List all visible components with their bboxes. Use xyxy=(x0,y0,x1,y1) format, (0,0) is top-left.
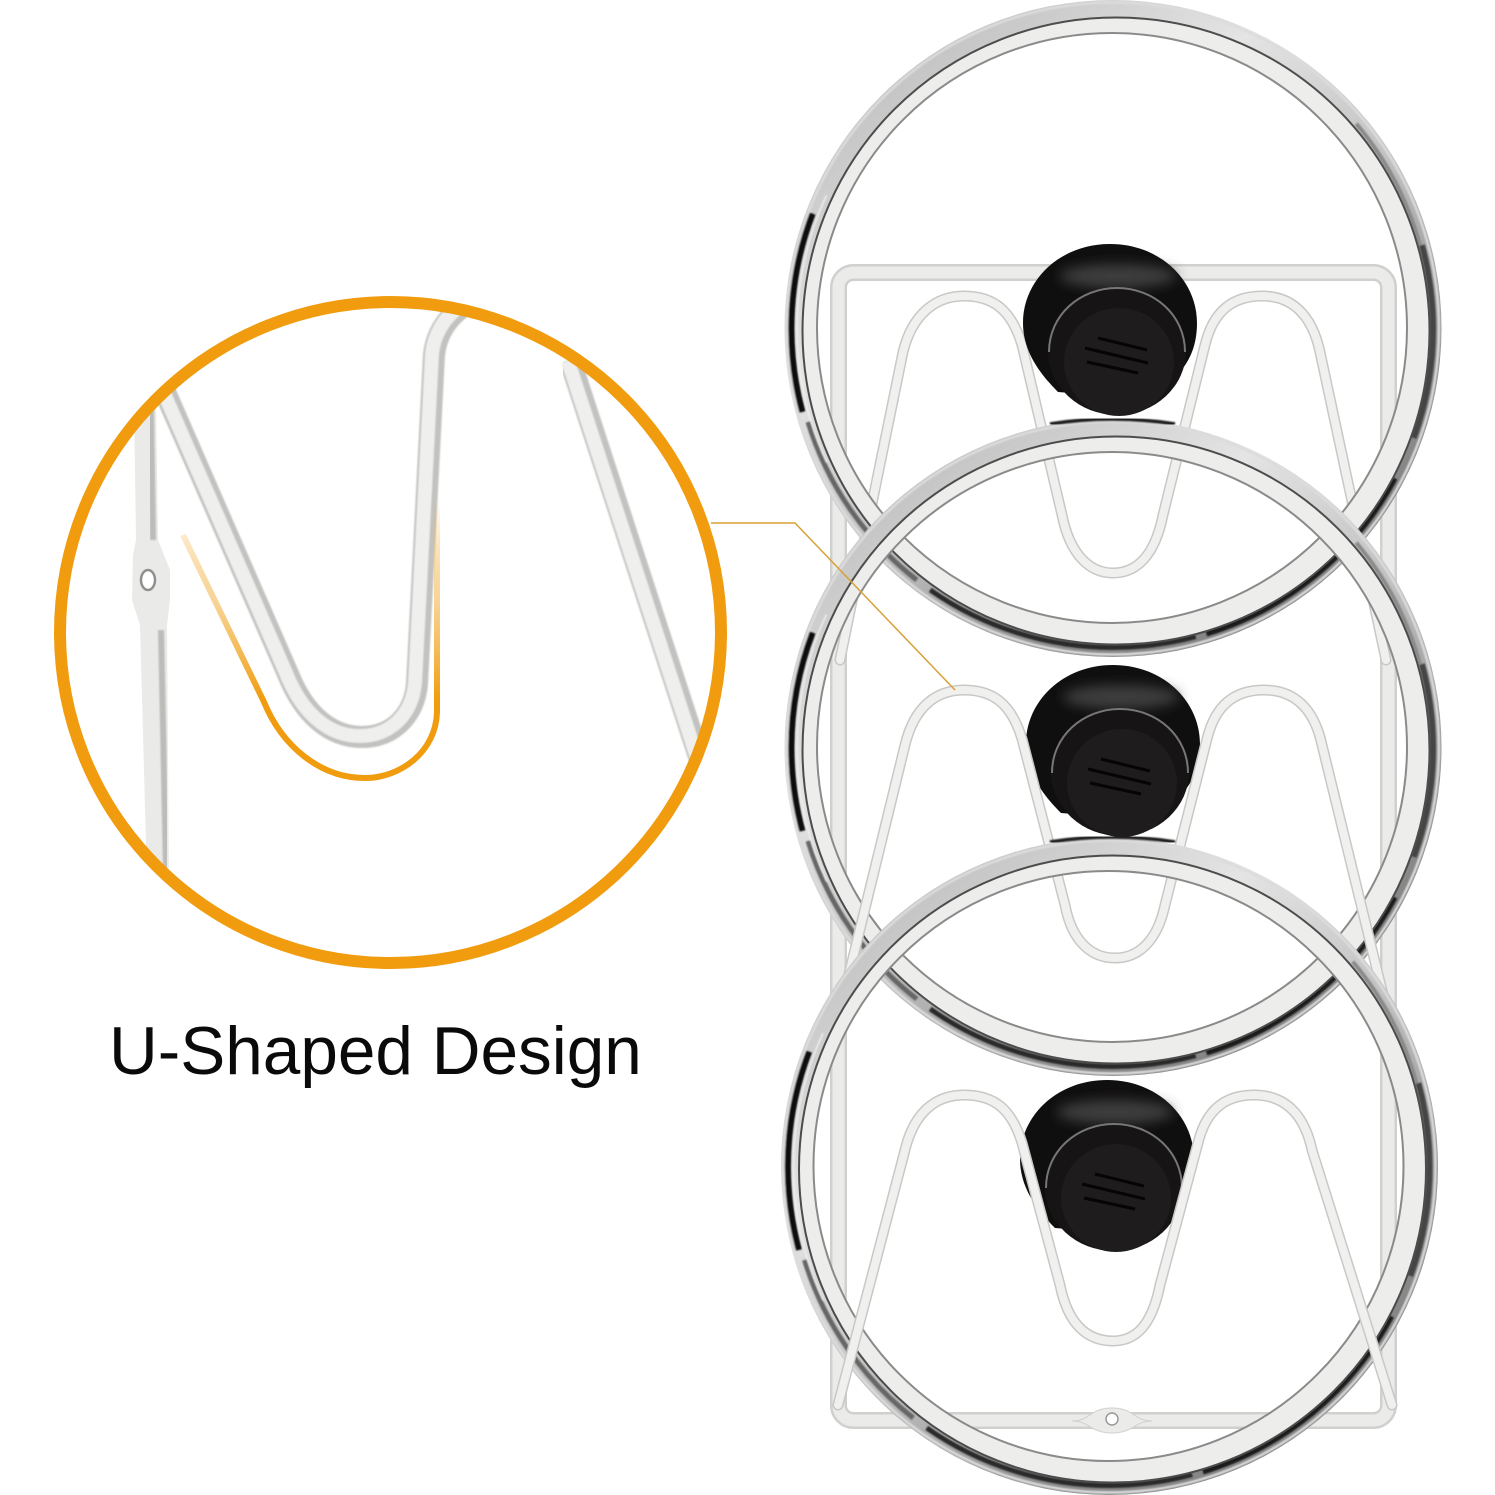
callout leader line xyxy=(711,523,955,690)
middle rack wire xyxy=(828,690,1399,1060)
wall frame xyxy=(838,272,1388,1433)
shadow on bottom lid rim xyxy=(1050,837,1175,842)
top knob xyxy=(1023,244,1197,416)
orange ring xyxy=(60,302,721,963)
bottom knob xyxy=(1020,1080,1194,1252)
right diagonal wire xyxy=(568,360,705,776)
orange U highlight outline xyxy=(183,500,437,778)
middle knob xyxy=(1026,665,1200,837)
shadow on middle lid rim xyxy=(1050,419,1175,424)
top lid xyxy=(784,0,1442,657)
bottom rack wire xyxy=(838,1095,1392,1405)
title: U-Shaped Design: U-Shaped Design xyxy=(109,1014,642,1089)
bottom lid xyxy=(781,838,1438,1495)
product: pot lid rack with three lids xyxy=(781,0,1442,1495)
left vertical wire with mounting hole xyxy=(132,400,170,880)
panel: zoomed detail circle xyxy=(60,302,721,963)
U-shaped wire xyxy=(163,307,461,737)
middle lid xyxy=(784,419,1442,1076)
top rack wire xyxy=(840,296,1386,660)
zoomed wires xyxy=(132,307,705,880)
